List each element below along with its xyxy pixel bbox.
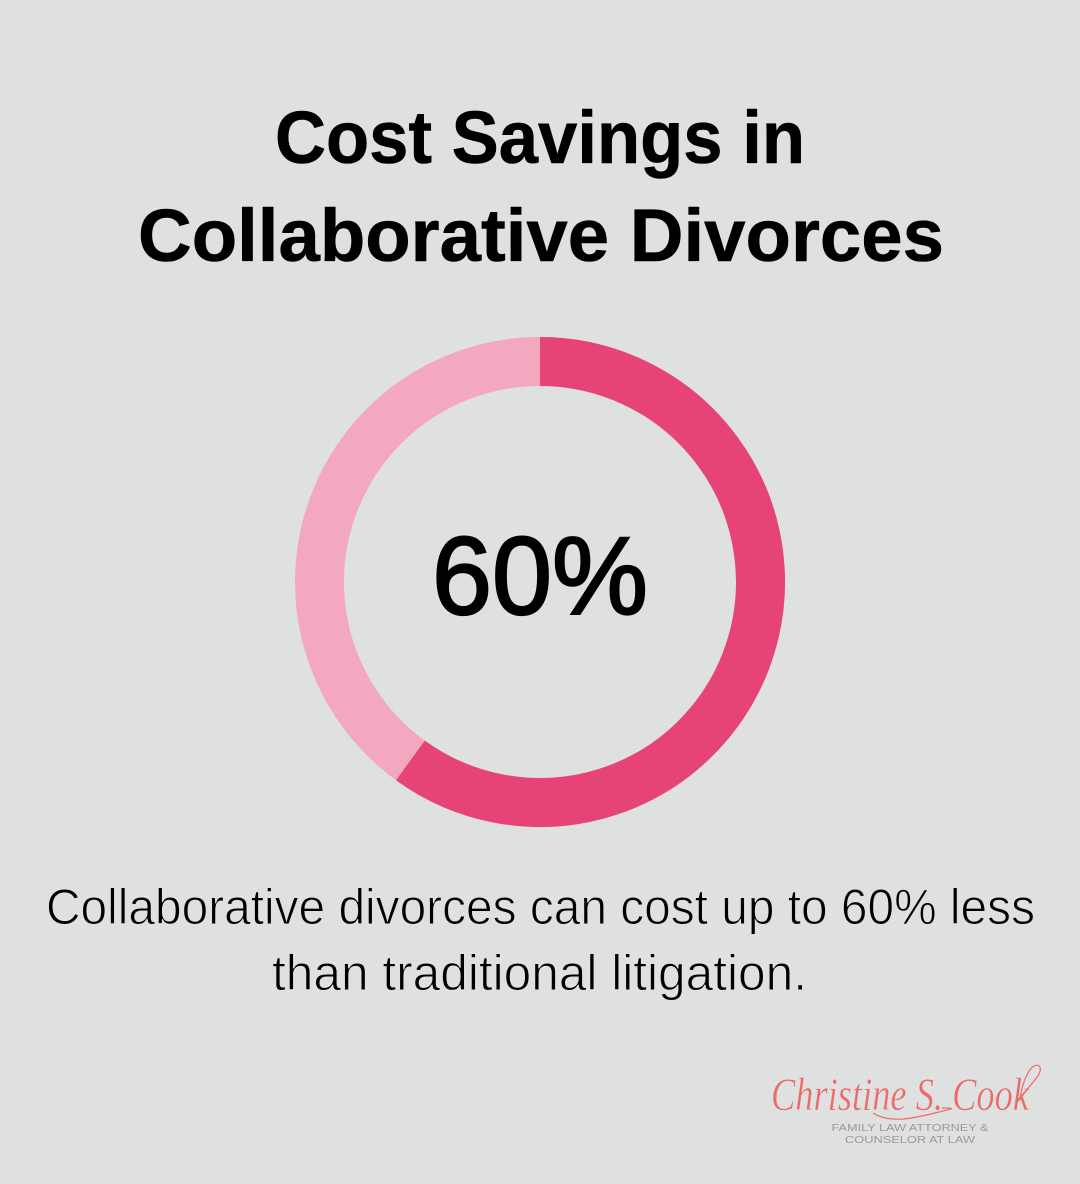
title: Collaborative Divorces bbox=[138, 194, 944, 277]
description text: Collaborative divorces can cost up to 60% less bbox=[46, 879, 1035, 935]
title bbox=[138, 96, 944, 277]
description text bbox=[46, 879, 1035, 1001]
logo: Christine S. Cook bbox=[771, 1065, 1040, 1146]
logo: Christine S. Cook: COUNSELOR AT LAW bbox=[845, 1134, 975, 1146]
logo: Christine S. Cook: FAMILY LAW ATTORNEY & bbox=[832, 1122, 988, 1134]
description text: than traditional litigation. bbox=[272, 945, 807, 1001]
donut value: 60% bbox=[432, 515, 648, 638]
title: Cost Savings in bbox=[275, 96, 805, 179]
donut chart: 60% bbox=[320, 362, 760, 802]
